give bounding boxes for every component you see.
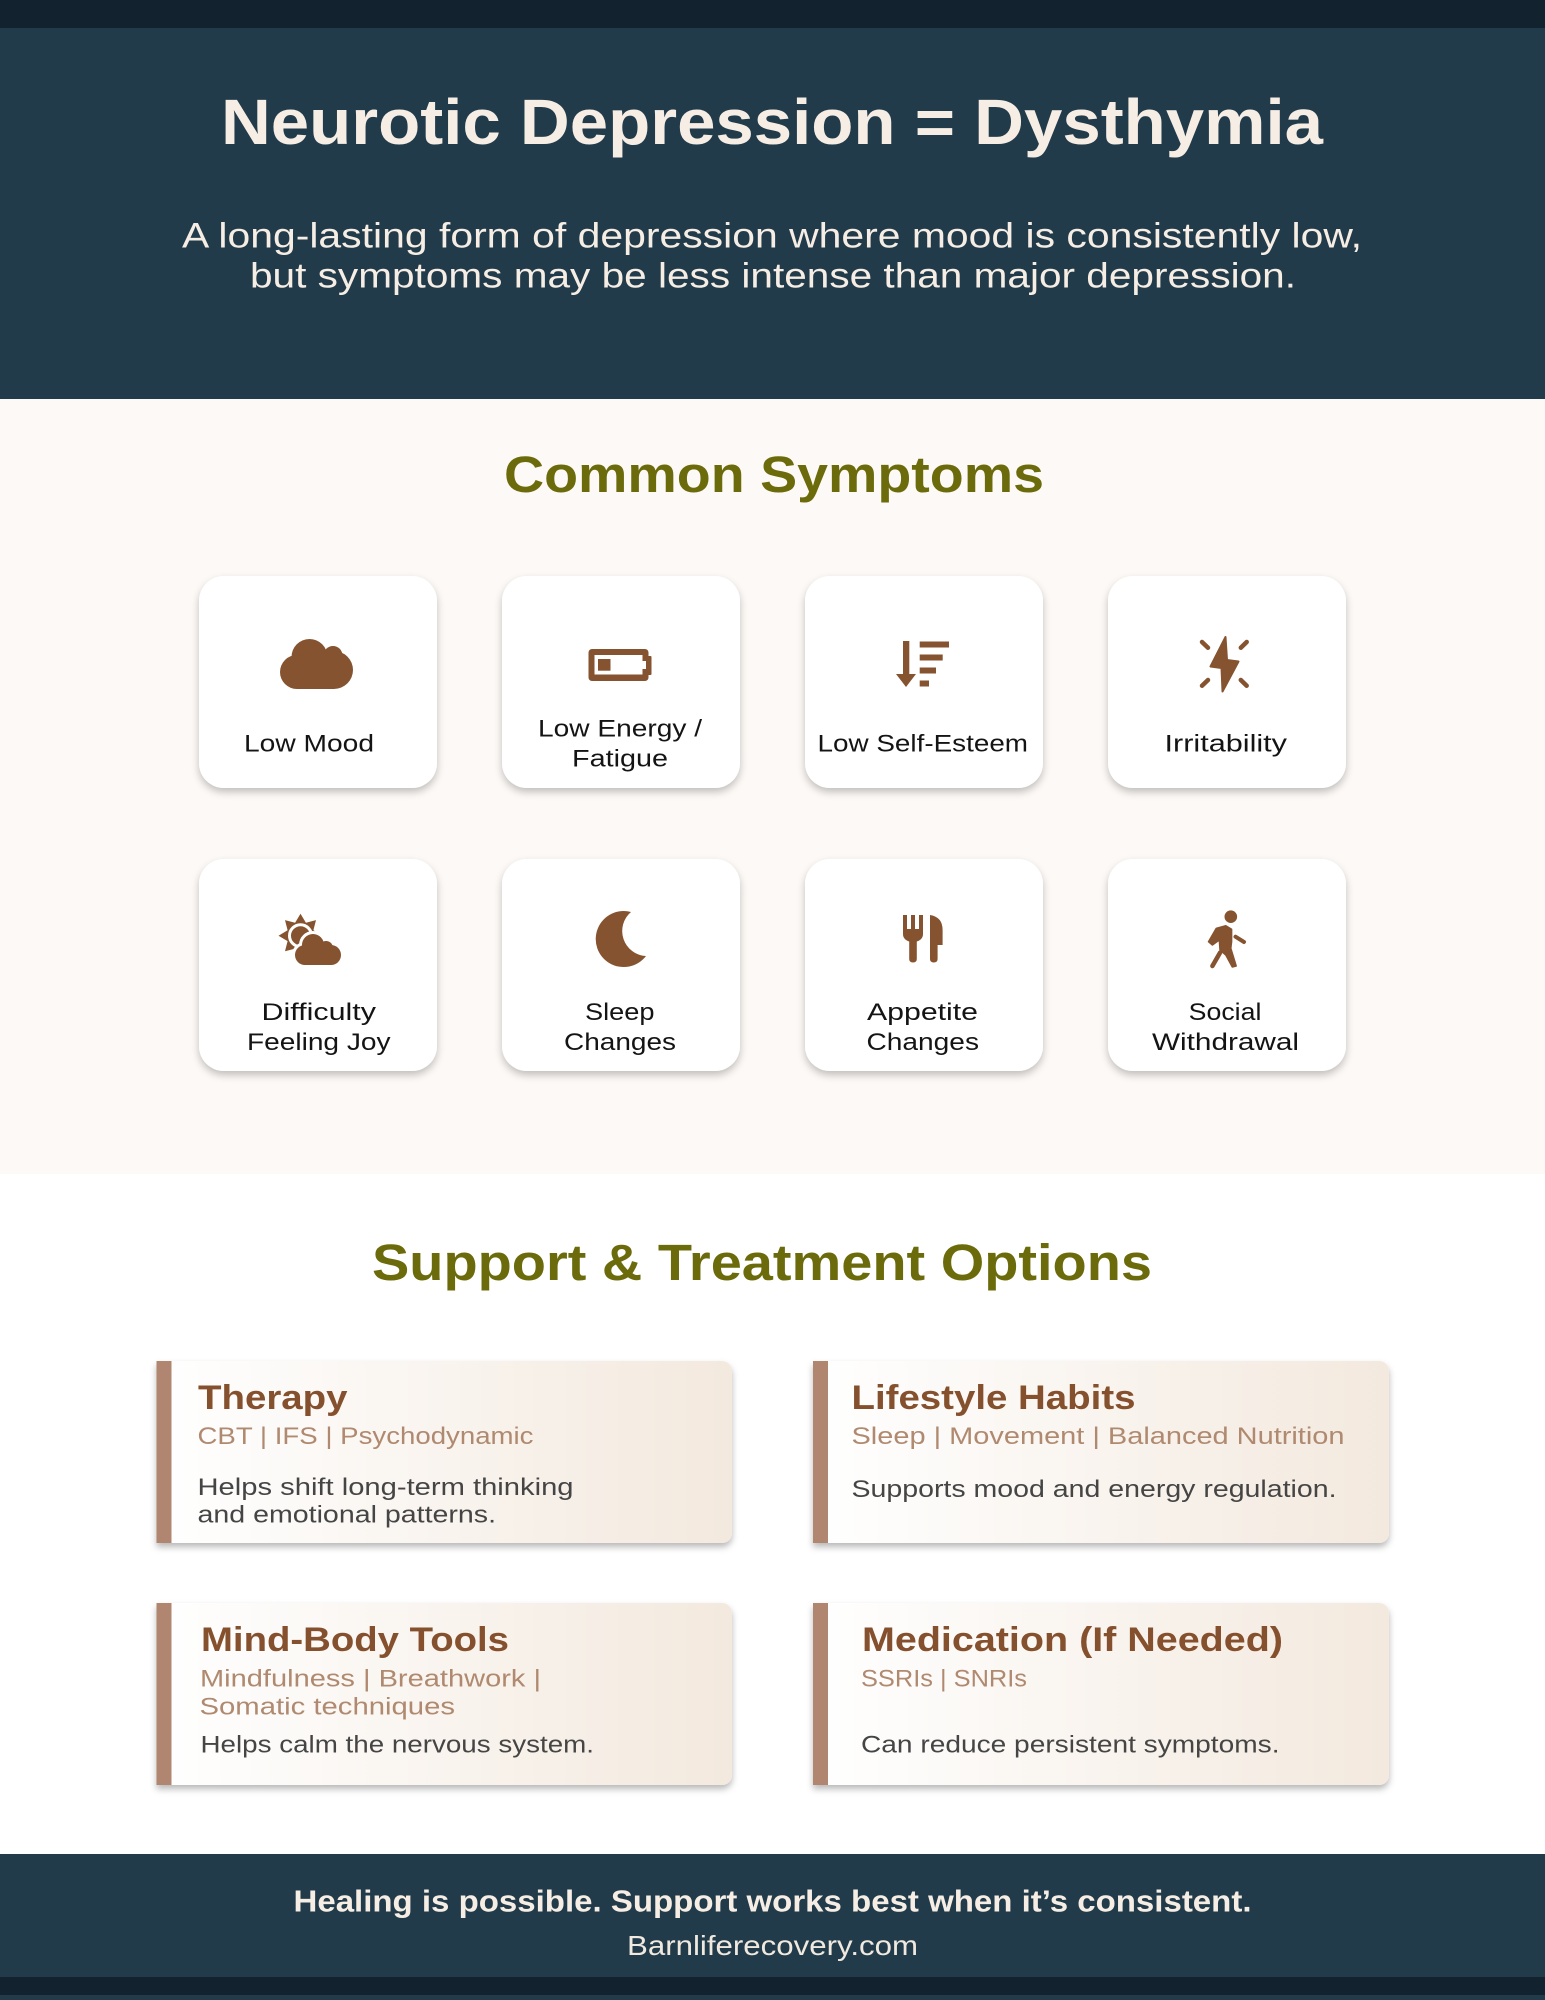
label bbox=[866, 999, 979, 1056]
subtitle: but symptoms may be less intense than major depression. bbox=[250, 256, 1296, 296]
card: mind-body tools bbox=[156, 1603, 732, 1785]
subtitle: A long-lasting form of depression where mood is consistently low, bbox=[182, 216, 1362, 256]
heading: support and treatment options: Support & Treatment Options bbox=[372, 1234, 1152, 1291]
panel: support and treatment bbox=[0, 1174, 1545, 1854]
card body: and emotional patterns. bbox=[198, 1502, 496, 1528]
label bbox=[538, 716, 702, 772]
panel: header bbox=[0, 0, 1545, 399]
icon: battery bbox=[588, 649, 652, 681]
card: medication bbox=[813, 1603, 1389, 1785]
label: Sleep bbox=[585, 999, 654, 1026]
label bbox=[247, 999, 390, 1056]
icon: crescent moon bbox=[596, 911, 646, 967]
card subtitle: SSRIs | SNRIs bbox=[861, 1666, 1027, 1692]
card subtitle: CBT | IFS | Psychodynamic bbox=[198, 1423, 534, 1450]
card: lifestyle habits bbox=[813, 1361, 1389, 1543]
card subtitle: Somatic techniques bbox=[200, 1694, 455, 1720]
panel: footer bbox=[0, 1854, 1545, 2000]
card subtitle bbox=[200, 1666, 541, 1720]
icon: cloud bbox=[280, 639, 353, 689]
card: sleep changes bbox=[502, 859, 740, 1071]
label: Low Self-Esteem bbox=[818, 730, 1028, 758]
footer website: Barnliferecovery.com bbox=[627, 1930, 918, 1961]
card subtitle: Mindfulness | Breathwork | bbox=[200, 1666, 541, 1692]
card: appetite changes bbox=[805, 859, 1043, 1071]
card body: Supports mood and energy regulation. bbox=[852, 1476, 1336, 1503]
label: Irritability bbox=[1164, 730, 1287, 758]
subtitle bbox=[182, 216, 1362, 296]
card title: Therapy bbox=[198, 1379, 348, 1417]
card: irritability bbox=[1108, 576, 1346, 788]
title: Neurotic Depression = Dysthymia bbox=[221, 86, 1323, 158]
card: low self-esteem bbox=[805, 576, 1043, 788]
card: low mood bbox=[199, 576, 437, 788]
heading: common symptoms: Common Symptoms bbox=[504, 446, 1044, 503]
label: Difficulty bbox=[262, 999, 376, 1026]
icon: sun behind cloud bbox=[278, 914, 341, 965]
label: Feeling Joy bbox=[247, 1029, 390, 1056]
card: therapy bbox=[156, 1361, 732, 1543]
icon: fork and knife bbox=[903, 915, 943, 962]
icon: walking person bbox=[1208, 910, 1244, 967]
card title: Lifestyle Habits bbox=[852, 1379, 1136, 1417]
icon: descending bars bbox=[896, 641, 949, 687]
icon: lightning bolt bbox=[1202, 637, 1247, 692]
footer message: Healing is possible. Support works best when it’s consistent. bbox=[294, 1884, 1252, 1918]
label: Social bbox=[1189, 999, 1261, 1026]
card: social withdrawal bbox=[1108, 859, 1346, 1071]
label: Withdrawal bbox=[1152, 1029, 1299, 1056]
card body: Can reduce persistent symptoms. bbox=[861, 1732, 1280, 1758]
card body: Helps shift long-term thinking bbox=[198, 1474, 574, 1501]
label bbox=[564, 999, 676, 1056]
label: Fatigue bbox=[572, 746, 668, 772]
panel: common symptoms bbox=[0, 399, 1545, 1174]
card: difficulty feeling joy bbox=[199, 859, 437, 1071]
label bbox=[1152, 999, 1299, 1056]
card body bbox=[198, 1474, 574, 1528]
card title: Mind-Body Tools bbox=[201, 1621, 509, 1659]
card: low energy bbox=[502, 576, 740, 788]
label: Changes bbox=[564, 1029, 676, 1056]
label: Low Energy / bbox=[538, 716, 702, 742]
label: Appetite bbox=[867, 999, 978, 1026]
card title: Medication (If Needed) bbox=[862, 1621, 1283, 1659]
card subtitle: Sleep | Movement | Balanced Nutrition bbox=[852, 1423, 1344, 1450]
label: Low Mood bbox=[244, 730, 374, 758]
card body: Helps calm the nervous system. bbox=[200, 1732, 594, 1758]
label: Changes bbox=[866, 1029, 979, 1056]
